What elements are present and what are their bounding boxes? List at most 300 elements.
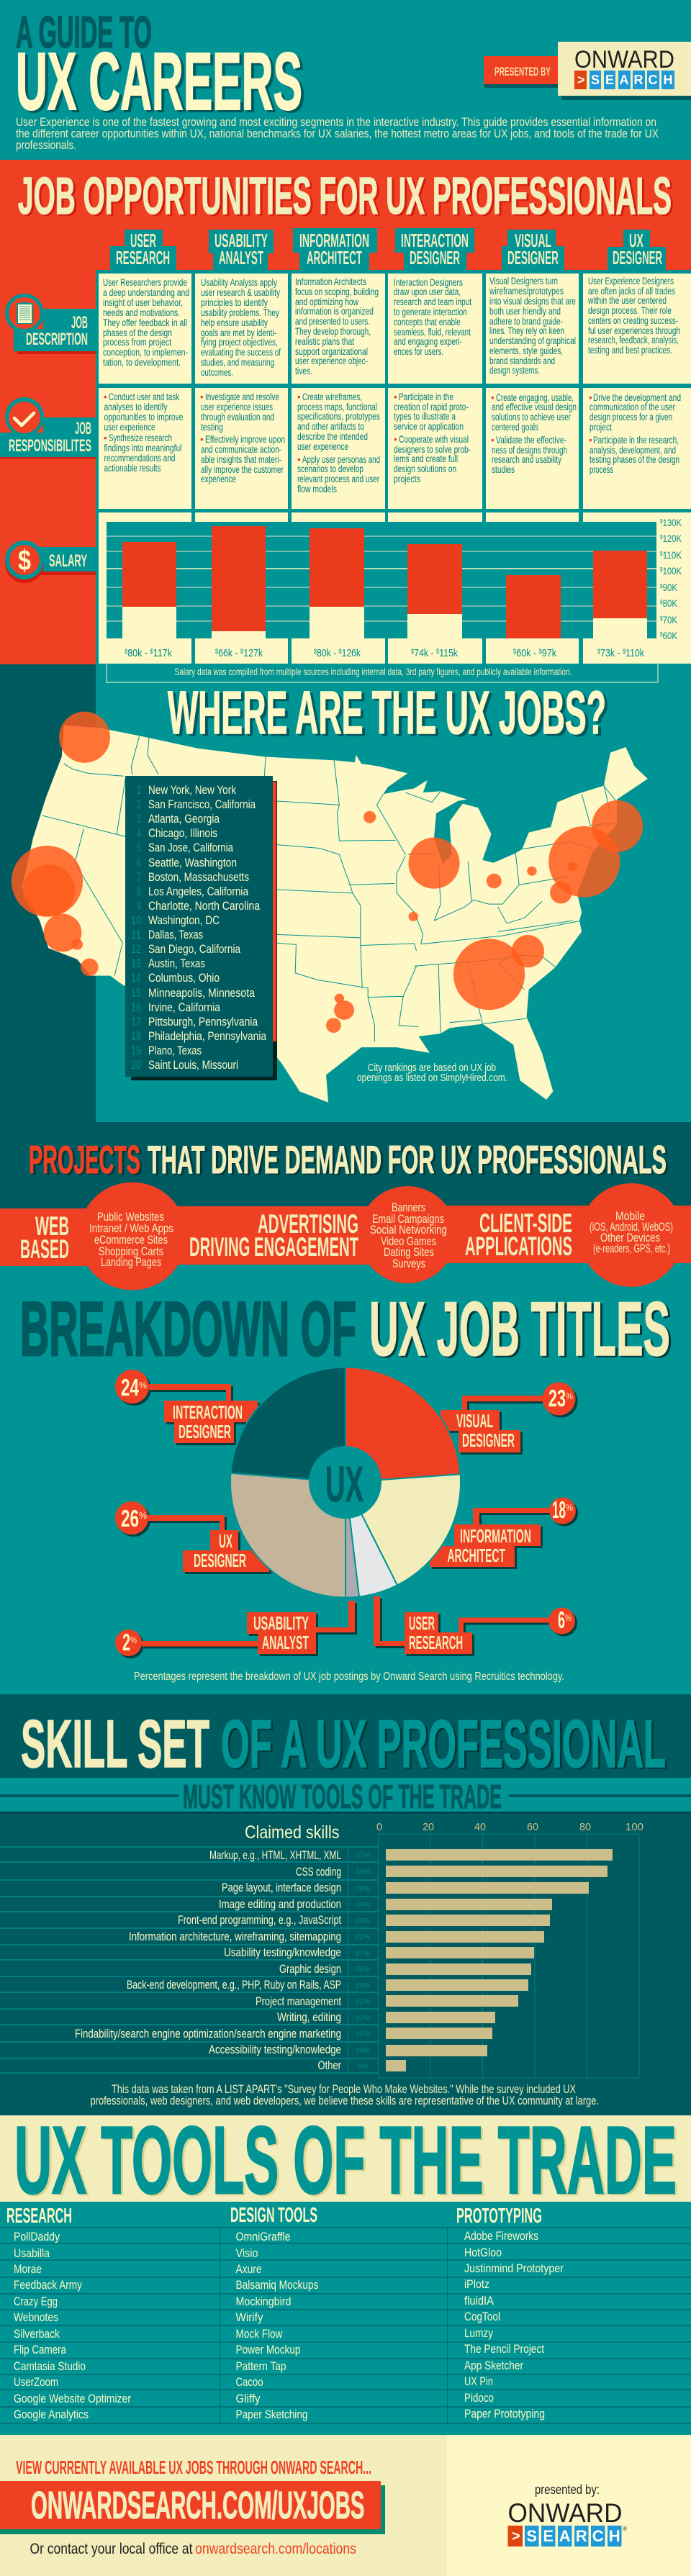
- callout: user research 6%: USER: [409, 1612, 435, 1634]
- city ranking list: [125, 776, 277, 1080]
- salary axis labels: 130K: [663, 517, 682, 528]
- city ranking list: 18: [131, 1029, 141, 1043]
- ux designer responsibilities: •: [589, 435, 592, 446]
- salary axis labels: $: [660, 518, 663, 525]
- visual designer responsibilities: ness of designs through: [492, 445, 567, 456]
- callout: visual designer 23%: [441, 1382, 576, 1452]
- salary range labels: 80k -: [127, 647, 150, 659]
- city ranking list: 19: [131, 1044, 141, 1057]
- information architect description: Information Architects: [295, 276, 366, 287]
- usability analyst responsibilities: user experience issues: [201, 402, 273, 412]
- column: design tools: Axure: [236, 2262, 262, 2276]
- ux designer responsibilities: process: [590, 464, 613, 475]
- information architect description: and optimizing how: [295, 297, 358, 307]
- callout: interaction designer 24%: %: [139, 1380, 147, 1391]
- bar: interaction designer: [407, 544, 462, 638]
- bar: usability analyst: [212, 526, 266, 638]
- percent labels: 85%: [356, 1868, 370, 1876]
- callout: visual designer 23%: DESIGNER: [462, 1429, 515, 1451]
- visual designer description: both user friendly and: [489, 306, 561, 317]
- skill labels: Information architecture, wireframing, sitemapping: [129, 1930, 341, 1943]
- row label: salary: [5, 541, 96, 583]
- city ranking list: 5: [137, 841, 141, 854]
- salary axis labels: 70K: [663, 614, 678, 625]
- job title tabs: [110, 228, 666, 270]
- city ranking list: Columbus, Ohio: [148, 971, 220, 985]
- interaction designer responsibilities: Participate in the: [399, 392, 453, 402]
- percent labels: 57%: [356, 1950, 370, 1958]
- slice: ux designer: [230, 1473, 346, 1598]
- project group: client-side applications: [465, 1208, 673, 1261]
- column: design tools: [230, 2204, 318, 2421]
- column: research: Silverback: [14, 2327, 60, 2341]
- footer logo: ®: [623, 2526, 627, 2532]
- job title tabs: RESEARCH: [116, 247, 170, 268]
- user research responsibilities: actionable results: [104, 463, 161, 474]
- information architect responsibilities: Apply user personas and: [302, 454, 380, 465]
- project group: advertising: Social Networking: [370, 1223, 447, 1237]
- map land: [22, 725, 648, 1103]
- skill labels: [75, 1848, 341, 2072]
- visual designer responsibilities: solutions to achieve user: [492, 412, 571, 422]
- city ranking list: 20: [131, 1058, 141, 1072]
- salary axis labels: $: [660, 534, 663, 541]
- skill labels: Back-end development, e.g., PHP, Ruby on Rails, ASP: [127, 1978, 341, 1992]
- city ranking list: Philadelphia, Pennsylvania: [148, 1029, 266, 1043]
- axis numbers: 0: [376, 1821, 382, 1833]
- footer logo: H: [609, 2527, 620, 2545]
- interaction designer description: to generate interaction: [394, 307, 467, 317]
- usability analyst responsibilities: testing: [201, 422, 223, 433]
- user research description: a deep understanding and: [103, 287, 189, 298]
- callout: visual designer 23%: %: [566, 1391, 573, 1401]
- callout: ux designer 26%: UX: [219, 1530, 232, 1552]
- usability analyst responsibilities: and communicate action-: [201, 444, 281, 455]
- usability analyst responsibilities: Effectively improve upon: [205, 434, 285, 445]
- presented by badge with logo: A: [619, 73, 629, 87]
- bars: [386, 1849, 613, 2071]
- visual designer description: elements, style guides,: [489, 345, 563, 356]
- salary axis labels: 100K: [663, 565, 682, 577]
- project group: web based: Intranet / Web Apps: [89, 1221, 173, 1235]
- callout: user research 6%: %: [565, 1612, 572, 1623]
- salary axis labels: $: [660, 566, 663, 573]
- job title tabs: USER: [130, 230, 156, 251]
- callout: ux designer 26%: [115, 1501, 269, 1572]
- tools table: [0, 2204, 691, 2423]
- map source note: openings as listed on SimplyHired.com.: [357, 1072, 507, 1084]
- column: prototyping: Justinmind Prototyper: [464, 2261, 564, 2275]
- city ranking list: Charlotte, North Carolina: [148, 899, 260, 913]
- call to action: Or contact your local office at: [30, 2541, 193, 2557]
- column: design tools: Cacoo: [236, 2375, 263, 2389]
- city ranking list: Saint Louis, Missouri: [148, 1058, 238, 1072]
- callout: visual designer 23%: 23: [548, 1385, 566, 1411]
- column: prototyping: iPlotz: [464, 2277, 489, 2291]
- city ranking list: Irvine, California: [148, 1000, 220, 1014]
- user research description: [103, 277, 189, 368]
- city ranking list: Atlanta, Georgia: [148, 812, 220, 826]
- visual designer description: [489, 276, 576, 376]
- column: design tools: Paper Sketching: [236, 2408, 308, 2421]
- callout: information architect 18%: INFORMATION: [460, 1525, 531, 1547]
- title: A GUIDE TO: [16, 8, 152, 58]
- column: prototyping: The Pencil Project: [464, 2342, 544, 2356]
- interaction designer responsibilities: designers to solve prob-: [394, 444, 471, 455]
- interaction designer description: [394, 277, 471, 357]
- user research responsibilities: •: [104, 392, 107, 402]
- project group: advertising: Email Campaigns: [372, 1212, 444, 1226]
- row 2: responsibilities text: [104, 392, 681, 494]
- city ranking list: 11: [131, 928, 141, 941]
- usability analyst responsibilities: •: [200, 392, 204, 402]
- project group: client-side applications: APPLICATIONS: [465, 1231, 572, 1261]
- usability analyst description: principles to identify: [201, 297, 268, 308]
- salary range labels: $: [240, 648, 243, 655]
- interaction designer responsibilities: design solutions on: [394, 464, 456, 474]
- user research responsibilities: Synthesize research: [109, 433, 172, 443]
- callout: usability analyst 2%: ANALYST: [262, 1632, 309, 1653]
- city ranking list: Seattle, Washington: [148, 856, 237, 869]
- job hotspot circles: [12, 712, 643, 1033]
- footer logo: S: [526, 2527, 537, 2545]
- slice: usability analyst: [346, 1483, 359, 1598]
- callout: ux designer 26%: DESIGNER: [194, 1550, 246, 1571]
- visual designer description: lines. They rely on keen: [489, 325, 564, 336]
- presented by badge with logo: E: [605, 73, 614, 87]
- icon: check mark: [14, 413, 34, 425]
- project group: advertising: [189, 1201, 447, 1270]
- skill labels: Image editing and production: [219, 1897, 341, 1911]
- salary range labels: $: [436, 648, 439, 655]
- salary axis labels: $: [660, 615, 663, 622]
- call to action: [0, 2457, 385, 2557]
- column: prototyping: [456, 2205, 564, 2421]
- callout: usability analyst 2%: USABILITY: [253, 1612, 309, 1634]
- presented by badge with logo: S: [591, 73, 600, 87]
- project group: web based: eCommerce Sites: [94, 1233, 168, 1247]
- information architect description: user experience objec-: [295, 356, 368, 366]
- project group: web based: WEB: [35, 1211, 69, 1241]
- usability analyst description: studies, and measuring: [201, 357, 274, 368]
- intro text: professionals.: [16, 138, 76, 152]
- callout: information architect 18%: 18: [552, 1496, 566, 1523]
- visual designer description: understanding of graphical: [489, 335, 576, 346]
- row 1: description text: [103, 276, 680, 378]
- city ranking list: 3: [137, 812, 141, 826]
- usability analyst description: goals are met by identi-: [201, 327, 276, 338]
- usability analyst description: outcomes.: [201, 367, 233, 378]
- column: research: Camtasia Studio: [14, 2359, 86, 2373]
- call to action: onwardsearch.com/locations: [195, 2541, 356, 2557]
- interaction designer responsibilities: types to illustrate a: [394, 411, 456, 422]
- presented by badge with logo: [484, 42, 691, 100]
- column: design tools: Wirify: [236, 2310, 263, 2324]
- ux designer responsibilities: [589, 392, 681, 475]
- usability analyst responsibilities: able insights that materi-: [201, 454, 281, 465]
- city ranking list: 4: [137, 826, 141, 840]
- column: research: Feedback Army: [14, 2278, 82, 2292]
- callout: user research 6%: RESEARCH: [409, 1632, 463, 1653]
- row label: job responsibilities: RESPONSIBILITES: [9, 436, 91, 456]
- axis numbers: 60: [527, 1821, 538, 1833]
- heading: skill set: SKILL SET: [21, 1706, 209, 1781]
- column: prototyping: HotGloo: [464, 2246, 502, 2259]
- salary range labels: 66k -: [218, 647, 240, 659]
- pie chart: UX: [325, 1456, 363, 1512]
- user research description: They offer feedback in all: [103, 317, 187, 328]
- column: research: Usabilla: [14, 2246, 50, 2260]
- information architect responsibilities: [297, 392, 380, 494]
- footer logo: presented by:: [535, 2482, 600, 2497]
- salary range labels: $: [125, 648, 127, 655]
- city ranking list: San Francisco, California: [148, 797, 256, 811]
- job title tabs: UX: [629, 230, 643, 251]
- city ranking list: 9: [137, 899, 141, 913]
- column: prototyping: Lumzy: [464, 2326, 493, 2340]
- interaction designer responsibilities: •: [394, 434, 397, 445]
- heading: breakdown of ux job titles: BREAKDOWN OF: [20, 1285, 356, 1372]
- callout: visual designer 23%: VISUAL: [456, 1410, 493, 1432]
- interaction designer responsibilities: [394, 392, 471, 484]
- city ranking list: New York, New York: [148, 783, 236, 797]
- project group: web based: BASED: [20, 1234, 69, 1264]
- usability analyst description: fying project objectives,: [201, 337, 278, 348]
- project group: advertising: Surveys: [392, 1257, 425, 1270]
- slice: user research: [346, 1483, 397, 1596]
- user research description: insight of user behavior,: [103, 297, 183, 308]
- visual designer responsibilities: Validate the effective-: [496, 435, 566, 446]
- user research responsibilities: •: [104, 433, 107, 443]
- footer logo: E: [543, 2527, 554, 2545]
- city ranking list: 13: [131, 957, 141, 970]
- column: prototyping: PROTOTYPING: [456, 2205, 542, 2228]
- call to action: VIEW CURRENTLY AVAILABLE UX JOBS THROUGH ONWARD SEARCH...: [16, 2457, 371, 2478]
- visual designer responsibilities: [491, 392, 577, 475]
- usability analyst description: evaluating the success of: [201, 347, 281, 358]
- city ranking list: Dallas, Texas: [148, 928, 203, 941]
- information architect responsibilities: describe the intended: [297, 431, 368, 442]
- column: design tools: DESIGN TOOLS: [230, 2204, 317, 2227]
- callout: information architect 18%: ARCHITECT: [448, 1545, 505, 1566]
- usability analyst description: [201, 277, 281, 378]
- salary range labels: 115k: [439, 647, 458, 659]
- footer logo: >: [512, 2528, 520, 2544]
- salary range labels: $: [623, 648, 625, 655]
- visual designer responsibilities: and effective visual design: [492, 402, 577, 412]
- column: design tools: Balsamiq Mockups: [236, 2278, 318, 2292]
- callout: information architect 18%: %: [566, 1502, 573, 1513]
- map source note: [357, 1062, 507, 1084]
- salary range labels: $: [339, 648, 342, 655]
- information architect responsibilities: and other artifacts to: [297, 421, 364, 432]
- user research responsibilities: Conduct user and task: [109, 392, 179, 402]
- bar: visual designer: [506, 575, 561, 638]
- interaction designer responsibilities: •: [394, 392, 397, 402]
- callout: interaction designer 24%: DESIGNER: [179, 1421, 231, 1442]
- column: design tools: Gliffy: [236, 2392, 261, 2405]
- interaction designer description: and engaging experi-: [394, 336, 462, 347]
- usability analyst responsibilities: [200, 392, 285, 484]
- bar: user research: [122, 542, 176, 638]
- city ranking list: 6: [137, 856, 141, 869]
- skill labels: Usability testing/knowledge: [224, 1945, 341, 1959]
- city ranking list: 7: [137, 870, 141, 884]
- ux designer description: within the user centered: [587, 295, 667, 306]
- interaction designer responsibilities: creation of rapid proto-: [394, 402, 469, 412]
- information architect description: realistic plans that: [295, 336, 354, 347]
- title: UX CAREERS: [16, 36, 302, 127]
- column: research: Morae: [14, 2262, 42, 2276]
- slice: information architect: [346, 1474, 461, 1585]
- visual designer responsibilities: centered goals: [492, 422, 538, 433]
- row label: salary: SALARY: [49, 551, 87, 571]
- city ranking list: Austin, Texas: [148, 957, 205, 970]
- visual designer responsibilities: •: [491, 435, 494, 446]
- visual designer description: brand standards and: [489, 356, 555, 366]
- footer logo: C: [592, 2527, 604, 2545]
- percent labels: 39%: [356, 2047, 370, 2055]
- city ranking list: 16: [131, 1000, 141, 1014]
- column: research: Google Website Optimizer: [14, 2392, 131, 2405]
- project group: advertising: Banners: [392, 1201, 425, 1214]
- column: research: RESEARCH: [6, 2205, 72, 2228]
- information architect description: focus on scoping, building: [295, 286, 379, 297]
- city ranking list: 2: [137, 797, 141, 811]
- visual designer description: Visual Designers turn: [489, 276, 558, 286]
- visual designer description: wireframes/prototypes: [489, 286, 564, 297]
- visual designer responsibilities: Create engaging, usable,: [496, 392, 574, 403]
- interaction designer description: research and team input: [394, 297, 471, 307]
- salary range labels: $: [411, 648, 414, 655]
- column: prototyping: UX Pin: [464, 2374, 493, 2388]
- title: [16, 8, 302, 127]
- percent labels: 63%: [356, 1917, 370, 1925]
- information architect responsibilities: relevant process and user: [297, 474, 379, 484]
- callout: interaction designer 24%: 24: [121, 1374, 139, 1401]
- usability analyst description: Usability Analysts apply: [201, 277, 277, 288]
- user research description: phases of the design: [103, 327, 172, 338]
- axis numbers: 100: [625, 1821, 643, 1833]
- presented by badge with logo: C: [648, 73, 658, 87]
- usability analyst responsibilities: •: [200, 434, 204, 445]
- salary axis labels: 60K: [663, 630, 678, 641]
- city ranking list: Boston, Massachusetts: [148, 870, 249, 884]
- user research description: needs and motivations.: [103, 307, 180, 318]
- city ranking list: 8: [137, 885, 141, 898]
- ux designer description: [587, 276, 680, 356]
- interaction designer description: seamless, fluid, relevant: [394, 327, 471, 338]
- column: design tools: OmniGraffle: [236, 2230, 291, 2243]
- interaction designer description: draw upon user data,: [394, 286, 461, 297]
- user research description: tation, to development.: [103, 357, 181, 368]
- job title tabs: INTERACTION: [401, 230, 469, 251]
- salary range labels: $: [314, 648, 317, 655]
- interaction designer responsibilities: Cooperate with visual: [399, 434, 469, 445]
- map source note: City rankings are based on UX job: [368, 1062, 496, 1074]
- pie chart note: Percentages represent the breakdown of UX job postings by Onward Search using Recruitics technology.: [134, 1671, 564, 1683]
- usability analyst responsibilities: through evaluation and: [201, 412, 274, 422]
- project group: client-side applications: Other Devices: [600, 1231, 660, 1244]
- city ranking list: 17: [131, 1015, 141, 1029]
- chart title: Claimed skills: [245, 1822, 340, 1843]
- axis numbers: 20: [423, 1821, 434, 1833]
- job title tabs: ANALYST: [219, 247, 263, 268]
- callout: ux designer 26%: 26: [121, 1505, 139, 1532]
- skills source note: [91, 2083, 599, 2107]
- column: design tools: Mock Flow: [236, 2327, 283, 2341]
- visual designer responsibilities: research and usability: [492, 454, 561, 465]
- user research description: conception, to implemen-: [103, 347, 188, 358]
- city ranking list: 14: [131, 971, 141, 985]
- user research responsibilities: [104, 392, 183, 474]
- callout: ux designer 26%: %: [139, 1510, 147, 1521]
- presented by badge with logo: >: [577, 73, 585, 87]
- column: prototyping: Pidoco: [464, 2391, 494, 2405]
- slice: interaction designer: [230, 1368, 346, 1483]
- axis numbers: 40: [474, 1821, 486, 1833]
- information architect responsibilities: scenarios to develop: [297, 464, 363, 474]
- salary range labels: $: [215, 648, 218, 655]
- column: research: Flip Camera: [14, 2343, 66, 2356]
- project group: advertising: DRIVING ENGAGEMENT: [189, 1232, 358, 1262]
- skill labels: CSS coding: [296, 1865, 341, 1879]
- column: research: [6, 2205, 131, 2421]
- state borders: [42, 736, 619, 1042]
- row label: job description: JOB: [71, 313, 88, 333]
- information architect responsibilities: specifications, prototypes: [297, 411, 380, 422]
- presented by badge with logo: R: [633, 73, 643, 87]
- user research description: process from project: [103, 337, 171, 348]
- city ranking list: 1: [137, 783, 141, 797]
- callout: usability analyst 2%: %: [130, 1635, 137, 1645]
- salary bar chart: [107, 517, 682, 659]
- column: research: Google Analytics: [14, 2408, 89, 2421]
- job title tabs: ARCHITECT: [307, 247, 362, 268]
- project group: web based: [20, 1210, 173, 1269]
- presented by badge with logo: H: [664, 73, 672, 87]
- user research responsibilities: analyses to identify: [104, 402, 168, 412]
- information architect responsibilities: Create wireframes,: [302, 392, 362, 402]
- column: prototyping: Paper Prototyping: [464, 2407, 545, 2421]
- city ranking list: Chicago, Illinois: [148, 826, 217, 840]
- salary axis labels: $: [660, 551, 663, 557]
- column: prototyping: fluidIA: [464, 2294, 494, 2308]
- callout: interaction designer 24%: [115, 1370, 258, 1443]
- city ranking list: Washington, DC: [148, 913, 220, 927]
- callout: information architect 18%: [430, 1496, 576, 1567]
- skill labels: Project management: [256, 1994, 341, 2008]
- percent labels: 56%: [356, 1966, 370, 1974]
- salary range labels: [125, 647, 644, 659]
- percent labels: 64%: [356, 1901, 370, 1909]
- job title tabs: USABILITY: [214, 230, 268, 251]
- axis numbers: 80: [579, 1821, 591, 1833]
- usability analyst description: user research & usability: [201, 287, 280, 298]
- user research responsibilities: opportunities to improve: [104, 412, 183, 422]
- footer logo: ONWARD: [508, 2498, 622, 2528]
- salary axis labels: 120K: [663, 533, 682, 544]
- callout: user research 6%: 6: [558, 1606, 565, 1633]
- salary range labels: 80k -: [317, 647, 339, 659]
- percent labels: 78%: [356, 1885, 370, 1893]
- user research description: User Researchers provide: [103, 277, 187, 288]
- visual designer responsibilities: studies: [492, 464, 515, 475]
- project group: web based: Public Websites: [97, 1210, 164, 1224]
- information architect responsibilities: •: [297, 454, 301, 465]
- information architect responsibilities: user experience: [297, 441, 348, 452]
- skill labels: Page layout, interface design: [222, 1881, 341, 1894]
